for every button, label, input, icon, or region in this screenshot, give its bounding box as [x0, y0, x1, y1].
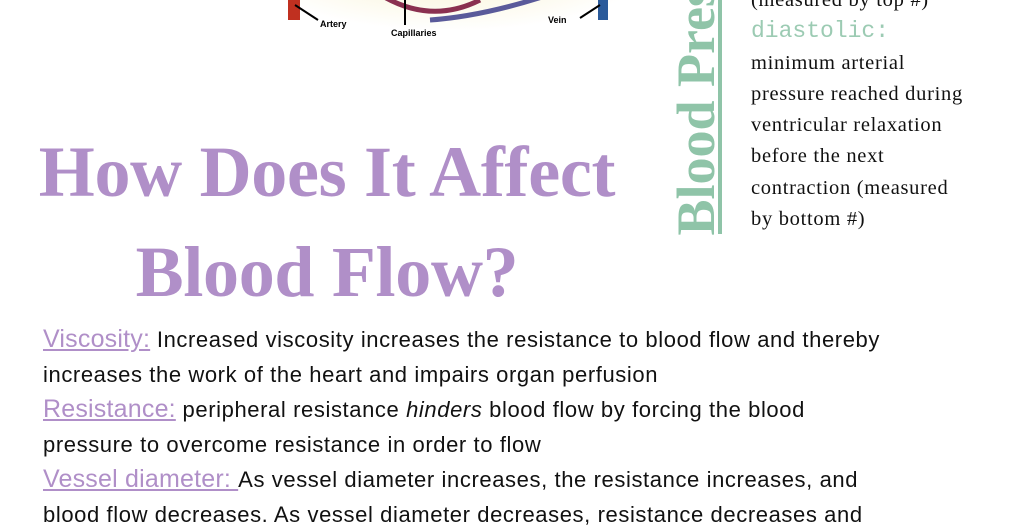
title: How Does It Affect: [39, 132, 615, 212]
diagram: capillary bed image: Vein: [548, 15, 567, 25]
text block: factors: Resistance: peripheral resistance hinders blood flow by forcing the blood pressure to overcome resistance in order to flow: [43, 395, 805, 456]
title: [39, 132, 616, 312]
text block: diastolic definition: ventricular relaxation: [751, 114, 942, 136]
diagram: capillary bed image: Capillaries: [391, 28, 437, 38]
text block: diastolic definition: diastolic:: [751, 18, 889, 44]
text block: factors: Viscosity: Increased viscosity increases the resistance to blood flow and thereby increases the work of the heart and impairs organ perfusion: [43, 325, 880, 386]
text block: diastolic definition: pressure reached during: [751, 83, 963, 105]
text block: diastolic definition: contraction (measured: [751, 177, 948, 199]
text block: diastolic definition: before the next: [751, 145, 884, 167]
diagram: capillary bed image: Artery: [320, 19, 347, 29]
text block: factors: Vessel diameter: As vessel diameter increases, the resistance increases, and blood flow decreases. As vessel diameter decreases, resistance decreases and: [43, 465, 863, 526]
text block: factors: [43, 325, 880, 526]
text block: diastolic definition: by bottom #): [751, 208, 865, 230]
diagram: capillary bed image: [288, 0, 608, 38]
title: Blood Flow?: [136, 232, 518, 312]
text block: diastolic definition: minimum arterial: [751, 52, 905, 74]
text block: diastolic definition: [751, 0, 963, 230]
